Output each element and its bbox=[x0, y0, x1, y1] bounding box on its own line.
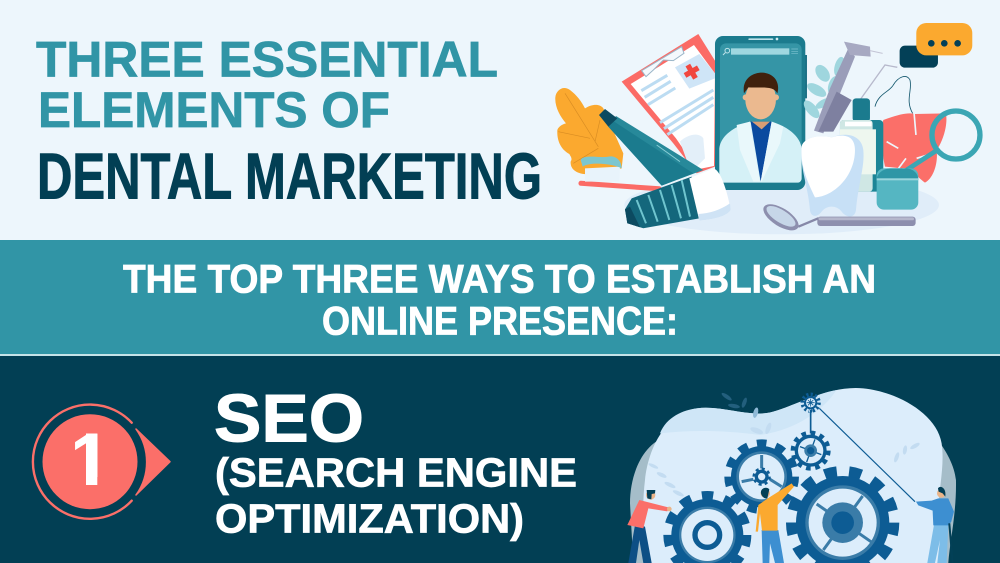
badge arrow bbox=[136, 429, 170, 495]
icon: dental implant bbox=[625, 168, 731, 228]
icon: phone with doctor bbox=[715, 36, 807, 190]
blob highlight bbox=[660, 390, 837, 435]
icon: toothpaste tube bbox=[599, 109, 703, 186]
banner heading bbox=[123, 258, 876, 343]
icon: magnifier bbox=[907, 111, 980, 170]
icon: coral leaf bbox=[881, 112, 946, 183]
icon: plant sprig bbox=[801, 56, 846, 121]
gear: top small bbox=[802, 394, 819, 433]
leaf decorations bbox=[648, 392, 921, 498]
icon: clipboard bbox=[622, 34, 717, 173]
icon: navy chat bubble bbox=[900, 46, 938, 68]
seo: SEO bbox=[214, 382, 364, 457]
number: 1 bbox=[70, 418, 111, 501]
icon: orange leaf bbox=[555, 88, 623, 174]
banner bbox=[0, 240, 1000, 356]
back blob bbox=[630, 400, 956, 563]
main blob bbox=[643, 388, 943, 563]
badge disc bbox=[42, 414, 138, 509]
ground shadow bbox=[624, 176, 939, 234]
icon: orange chat bubble bbox=[916, 23, 972, 55]
rope bbox=[819, 408, 915, 502]
icon: tooth bbox=[801, 135, 864, 216]
gear: bottom left bbox=[668, 496, 747, 563]
banner heading: THE TOP THREE WAYS TO ESTABLISH AN bbox=[123, 258, 876, 302]
optimization: OPTIMIZATION) bbox=[215, 495, 524, 541]
gear: upper small bbox=[793, 433, 828, 468]
gear: large bbox=[792, 472, 893, 563]
icon: dental mirror bbox=[759, 199, 916, 236]
person: centre, orange shirt bbox=[756, 483, 794, 563]
illustration: people turning gears bbox=[627, 388, 956, 563]
red cross bbox=[681, 61, 702, 82]
person: right, blue shirt bbox=[916, 487, 954, 563]
banner heading: ONLINE PRESENCE: bbox=[322, 299, 678, 343]
icon: mouthwash bottle bbox=[840, 98, 883, 192]
title line: elements of: ELEMENTS OF bbox=[38, 82, 390, 138]
search bar bbox=[723, 48, 798, 55]
title bbox=[36, 31, 542, 213]
doctor bbox=[719, 73, 802, 183]
icon: floss wire bbox=[875, 76, 913, 113]
number badge bbox=[33, 405, 170, 519]
title line: dental marketing: DENTAL MARKETING bbox=[37, 140, 542, 212]
icon: dental handpiece bbox=[814, 42, 897, 133]
icon: floss box bbox=[877, 168, 918, 210]
ring bbox=[33, 405, 132, 519]
search engine: (SEARCH ENGINE bbox=[215, 450, 577, 496]
person: left, red shirt bbox=[627, 490, 672, 563]
illustration: dental collage bbox=[555, 23, 980, 236]
icon: toothbrush bbox=[578, 156, 662, 191]
section heading bbox=[214, 382, 577, 541]
title line: three essential: THREE ESSENTIAL bbox=[36, 31, 498, 87]
gear: middle bbox=[728, 443, 795, 510]
